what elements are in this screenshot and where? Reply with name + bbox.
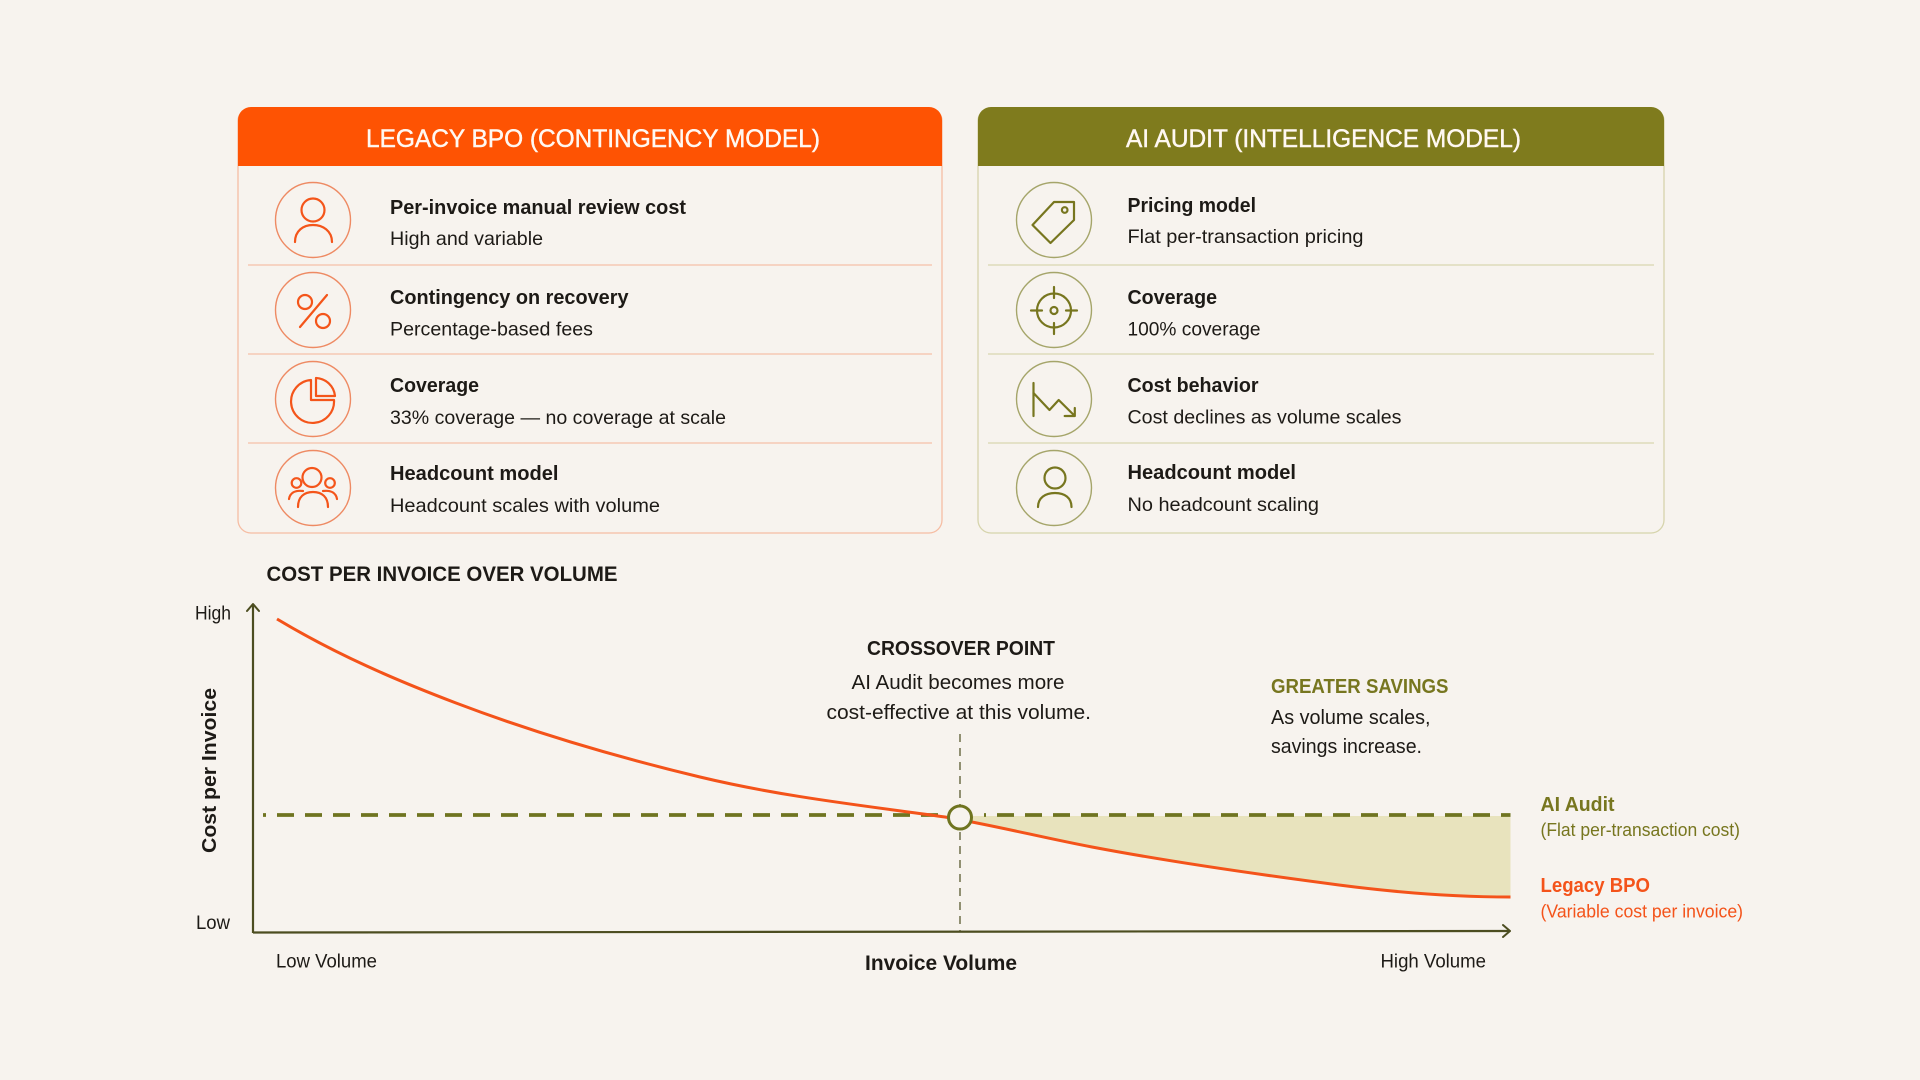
x-axis low volume label: Low Volume (276, 952, 377, 972)
chart title: COST PER INVOICE OVER VOLUME (266, 563, 618, 586)
legend: legacy BPO: Legacy BPO (1540, 874, 1650, 897)
panel header: legacy BPO (238, 107, 942, 166)
icon: price tag (1016, 182, 1092, 258)
text: cost behavior: Cost behavior (1128, 374, 1259, 397)
text: cost behavior: Cost declines as volume scales (1128, 406, 1402, 428)
icon: pie chart (276, 362, 350, 436)
text: headcount model: Headcount model (390, 462, 558, 485)
icon: person (1016, 450, 1092, 526)
text: per-invoice manual review cost: Per-invoice manual review cost (390, 196, 686, 219)
text: coverage: 100% coverage (1128, 318, 1260, 340)
text: per-invoice manual review cost (390, 196, 686, 250)
y-axis high label: High (195, 604, 231, 624)
row: headcount model (1016, 450, 1319, 526)
row: cost behavior (1016, 362, 1402, 436)
y-axis low label: Low (196, 913, 230, 934)
text: headcount model (1128, 461, 1319, 516)
x-axis high volume label: High Volume (1380, 952, 1486, 972)
crossover marker (948, 806, 972, 829)
text: headcount model: Headcount scales with volume (390, 495, 660, 517)
greater savings callout (1271, 675, 1448, 758)
crossover vertical dashed line (959, 734, 961, 931)
panel header: legacy BPO: LEGACY BPO (CONTINGENCY MODEL) (366, 125, 820, 153)
legend: legacy BPO: (Variable cost per invoice) (1540, 902, 1743, 922)
legend: AI audit: (Flat per-transaction cost) (1540, 820, 1740, 840)
panel header: AI audit: AI AUDIT (INTELLIGENCE MODEL) (1126, 125, 1521, 153)
row: contingency on recovery (276, 272, 629, 348)
text: pricing model: Flat per-transaction pricing (1128, 226, 1364, 248)
crossover point callout: cost-effective at this volume. (826, 702, 1091, 724)
crossover point callout: AI Audit becomes more (852, 672, 1064, 694)
text: coverage (390, 374, 726, 429)
text: contingency on recovery (390, 286, 629, 340)
legend: legacy BPO (1540, 874, 1743, 922)
x-axis title: Invoice Volume (865, 951, 1017, 975)
chart: cost per invoice over volume (195, 563, 1743, 975)
text: coverage (1128, 286, 1260, 340)
panel: AI audit (978, 107, 1664, 533)
y-axis title: Cost per Invoice (199, 688, 221, 853)
row: headcount model (276, 450, 660, 526)
legend: AI audit: AI Audit (1540, 793, 1615, 816)
text: coverage: 33% coverage — no coverage at scale (390, 407, 726, 429)
icon: target crosshair (1016, 272, 1092, 348)
text: cost behavior (1128, 374, 1402, 428)
text: pricing model: Pricing model (1128, 194, 1256, 217)
icon: declining chart (1016, 362, 1092, 436)
text: headcount model (390, 462, 660, 517)
text: coverage: Coverage (1128, 286, 1217, 309)
row: pricing model (1016, 182, 1364, 258)
savings area (972, 816, 1510, 897)
text: headcount model: No headcount scaling (1128, 494, 1319, 516)
legend: AI audit (1540, 793, 1740, 840)
row: coverage (1016, 272, 1260, 348)
AI audit flat dashed line (263, 813, 1510, 817)
greater savings callout: As volume scales, (1271, 707, 1430, 729)
panel: legacy BPO (238, 107, 942, 533)
axes with arrows (247, 604, 1510, 937)
row: coverage (276, 362, 726, 436)
text: coverage: Coverage (390, 374, 479, 397)
text: headcount model: Headcount model (1128, 461, 1296, 484)
greater savings callout: GREATER SAVINGS (1271, 675, 1448, 698)
legacy BPO cost curve (277, 619, 1510, 897)
text: pricing model (1128, 194, 1364, 248)
greater savings callout: savings increase. (1271, 736, 1422, 758)
row: per-invoice manual review cost (276, 182, 686, 258)
crossover point callout (826, 637, 1091, 724)
crossover point callout: CROSSOVER POINT (867, 637, 1055, 660)
icon: person (276, 182, 350, 258)
panel header: AI audit (978, 107, 1664, 166)
text: per-invoice manual review cost: High and variable (390, 228, 543, 250)
icon: group of people (276, 450, 350, 526)
icon: percent (276, 272, 350, 348)
text: contingency on recovery: Contingency on recovery (390, 286, 629, 309)
text: contingency on recovery: Percentage-based fees (390, 318, 593, 340)
